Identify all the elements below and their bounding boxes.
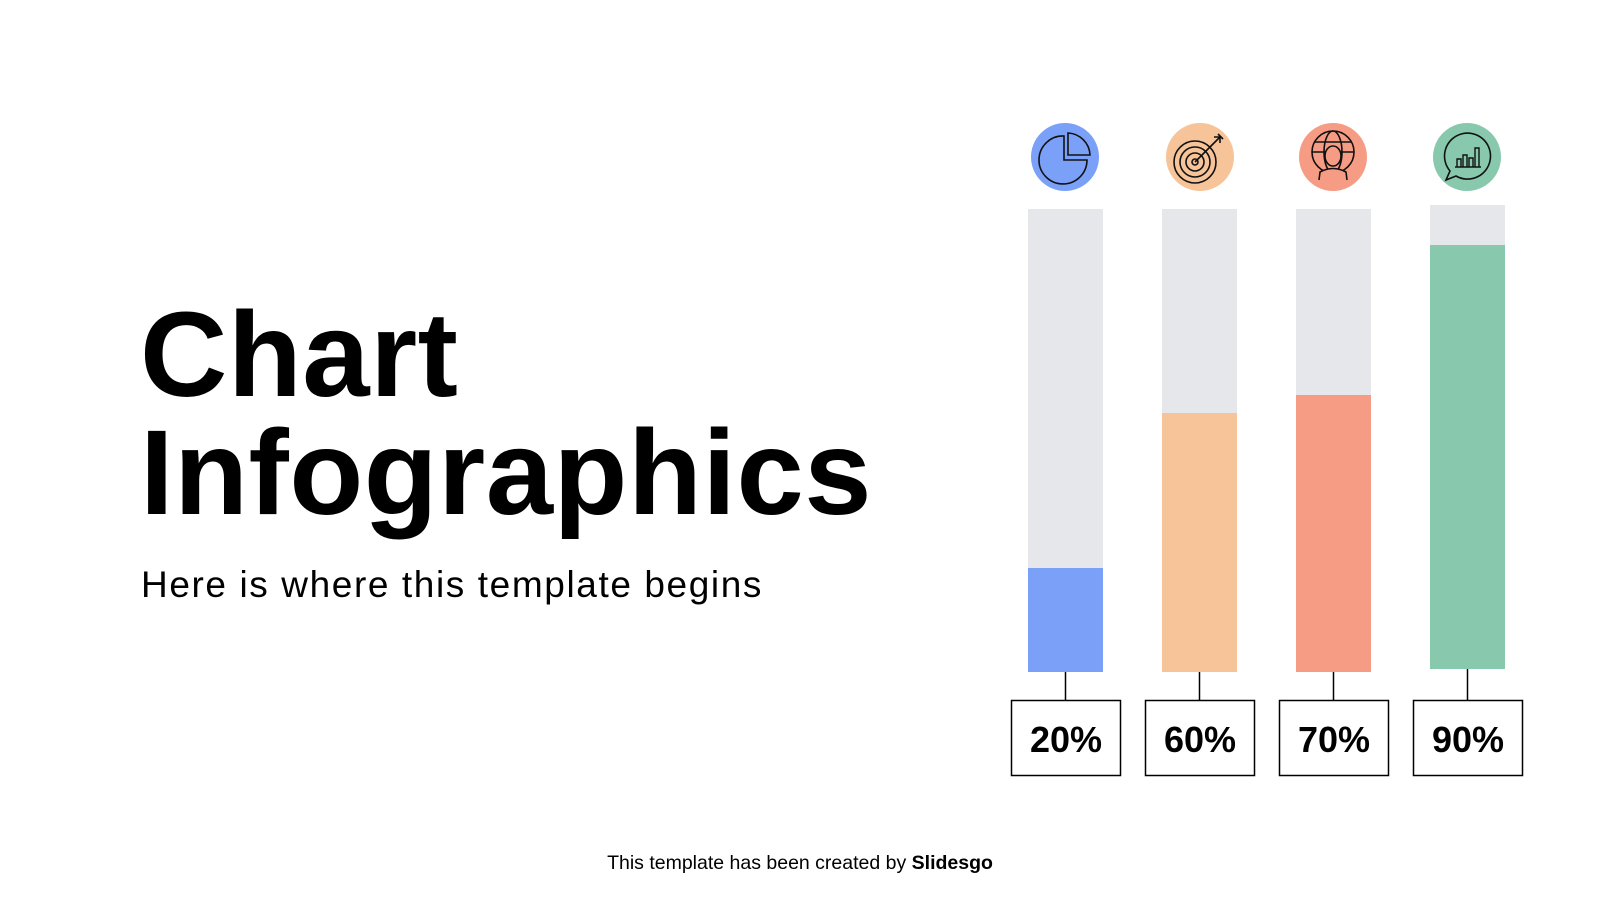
bar 2: 60%: 60%	[1164, 719, 1236, 760]
icon: pie chart	[1031, 123, 1099, 191]
footer: This template has been created by Slidesgo	[607, 852, 993, 874]
icon: chat with bar chart	[1433, 123, 1501, 191]
title: Infographics	[140, 404, 872, 540]
bar 1: 20%: 20%	[1030, 719, 1102, 760]
title: Chart	[140, 286, 458, 422]
bar 2: 60%	[1146, 209, 1254, 776]
title	[140, 286, 872, 540]
icon: global person	[1299, 123, 1367, 191]
bar 4: 90%	[1414, 205, 1522, 776]
bar 3: 70%: 70%	[1298, 719, 1370, 760]
bar 1: 20%	[1012, 209, 1120, 776]
icon: target	[1166, 123, 1234, 191]
subtitle: Here is where this template begins	[141, 564, 763, 605]
bar 4: 90%: 90%	[1432, 719, 1504, 760]
bar 3: 70%	[1280, 209, 1388, 776]
